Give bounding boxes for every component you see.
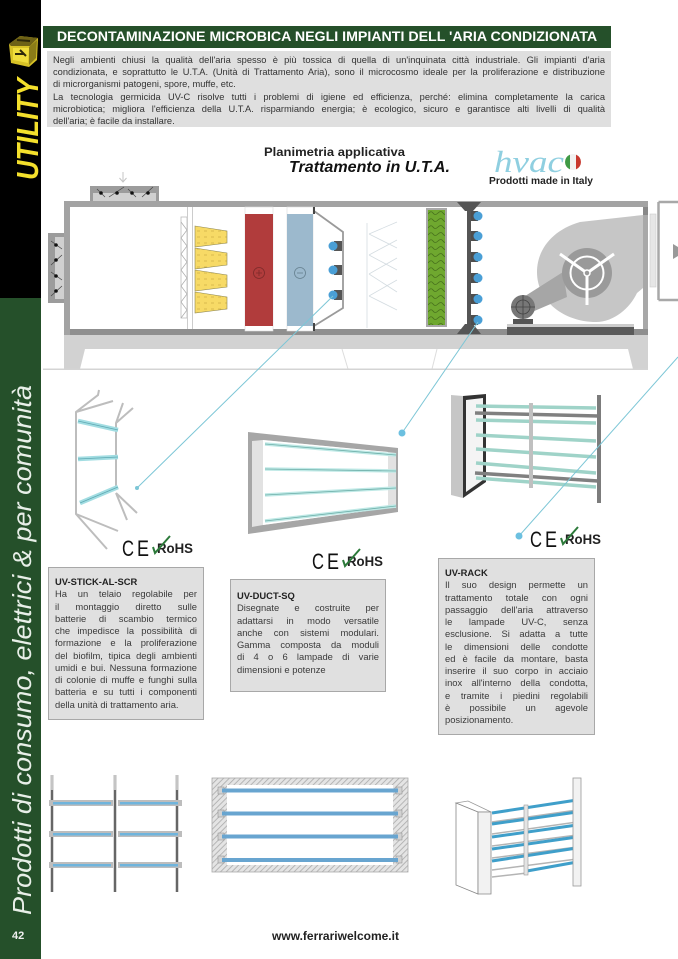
intro text block: di microrganismi patogeni, spore, muffe, etc. [53, 79, 236, 89]
product photo: UV-STICK-AL-SCR [76, 390, 137, 549]
product card: UV-RACK: le lampade UV-C, senza [445, 616, 588, 627]
product card: UV-RACK: trattamento totale con ogni [445, 592, 588, 602]
sidebar: black utility band [0, 0, 45, 298]
product card: UV-DUCT-SQ: dimensioni e potenze [237, 664, 326, 674]
callout: UV-RACK [516, 357, 678, 540]
product card: UV-RACK: passaggio dell'aria attraverso [445, 604, 588, 615]
sidebar: green category band [0, 298, 41, 959]
certification marks: UV-RACK: E [545, 527, 557, 552]
side air intake with dampers [48, 233, 64, 303]
technical drawing: UV-RACK [456, 778, 581, 894]
product card: UV-STICK-AL-SCR: di colonie di muffe e funghi sulla [55, 674, 197, 685]
outlet duct [643, 202, 678, 300]
certification marks: UV-DUCT-SQ [312, 549, 383, 574]
centrifugal fan and motor [507, 215, 643, 335]
intro text block: dell'aria; è facile da installare. [53, 116, 175, 126]
droplet eliminator [367, 222, 397, 328]
callout: UV-DUCT-SQ [398, 322, 478, 436]
icon: yellow utility box [9, 36, 38, 67]
callout: UV-STICK-AL-SCR [135, 296, 333, 490]
UV lamp column with six lamps [457, 202, 482, 334]
product card: UV-DUCT-SQ: adattarsi in modo versatile [237, 614, 379, 626]
product card: UV-STICK-AL-SCR: batterie di scambio termico [55, 613, 197, 624]
intro text block: microbiotica; migliora l'efficienza della U.T.A. risparmiando energia; è ecologico, sicuro e garantisce alti livelli di qualità [53, 104, 605, 114]
footer website: www.ferrariwelcome.it [272, 929, 399, 943]
product card: UV-RACK: posizionamento. [445, 714, 513, 725]
diagram heading: Planimetria applicativa [264, 145, 405, 159]
callout lines to the product photos [135, 296, 678, 540]
product card: UV-STICK-AL-SCR [48, 567, 204, 720]
product card: UV-STICK-AL-SCR: UV-STICK-AL-SCR [55, 576, 137, 587]
intro text block: Negli ambienti chiusi la qualità dell'aria spesso è più tossica di quella di un'inquinata città industriale. Gli impianti d'aria [53, 55, 605, 65]
product card: UV-DUCT-SQ: di 4 o 6 lampade di varie [237, 651, 379, 662]
product card: UV-STICK-AL-SCR: del biofilm, tipica degli ambienti [55, 650, 197, 660]
heating coil [245, 207, 273, 331]
section title [43, 26, 611, 48]
product card: UV-RACK: Il suo design permette un [445, 579, 588, 590]
technical drawing: UV-STICK-AL-SCR [49, 775, 182, 892]
certification marks: UV-DUCT-SQ: RoHS [347, 553, 383, 569]
product card: UV-RACK: UV-RACK [445, 567, 488, 578]
cooling coil [287, 207, 313, 331]
air handling unit diagram [43, 172, 678, 370]
product card: UV-RACK: inserire il suo corpo in acciaio [445, 665, 588, 676]
product card: UV-RACK [438, 558, 595, 735]
product card: UV-DUCT-SQ: anche con sistemi modulari. [237, 627, 379, 638]
product card: UV-STICK-AL-SCR: Ha un telaio regolabile per [55, 588, 197, 599]
product card: UV-STICK-AL-SCR: umidi e bui. Nessuna formazione [55, 662, 197, 673]
product card: UV-RACK: è possibile un agevole [445, 702, 588, 713]
casing and base [43, 201, 648, 370]
certification marks: UV-RACK [530, 527, 601, 552]
certification marks: UV-STICK-AL-SCR [122, 536, 193, 561]
product card: UV-RACK: le dimensioni delle condotte [445, 640, 588, 652]
intro text block: La tecnologia germicida UV-C risolve tutti i problemi di igiene ed efficienza, perché: elimina completamente la carica [53, 92, 605, 102]
product photo: UV-RACK [451, 394, 601, 503]
section title: DECONTAMINAZIONE MICROBICA NEGLI IMPIANTI DELL 'ARIA CONDIZIONATA [57, 29, 597, 45]
certification marks: UV-RACK: C [530, 527, 542, 552]
UV lamp hood with three lamps [313, 207, 343, 331]
certification marks: UV-RACK: RoHS [565, 531, 601, 547]
hvac logo [489, 144, 593, 187]
product card: UV-RACK: esclusione. Si adatta a tutte [445, 628, 588, 639]
product card: UV-DUCT-SQ [230, 579, 386, 692]
certification marks: UV-STICK-AL-SCR: E [137, 536, 149, 561]
top air intake with dampers [90, 172, 159, 201]
product card: UV-STICK-AL-SCR: il montaggio diretto sulle [55, 600, 197, 612]
product card: UV-RACK: ed è facile da montare, basta [445, 653, 588, 664]
product card: UV-STICK-AL-SCR: formazione e la proliferazione [55, 637, 197, 648]
product card: UV-STICK-AL-SCR: batteria e su tutti i componenti [55, 686, 197, 697]
intro text block [47, 51, 611, 127]
product card: UV-DUCT-SQ: Gamma composta da moduli [237, 639, 379, 650]
certification marks: UV-STICK-AL-SCR: C [122, 536, 134, 561]
product card: UV-RACK: inox all'interno della condotta, [445, 677, 588, 688]
certification marks: UV-STICK-AL-SCR: RoHS [157, 540, 193, 556]
page number: 42 [12, 930, 24, 942]
sidebar word: UTILITY: UTILITY [10, 75, 45, 180]
certification marks: UV-DUCT-SQ: E [327, 549, 339, 574]
product card: UV-STICK-AL-SCR: della unità di trattamento aria. [55, 698, 179, 710]
product card: UV-DUCT-SQ: Disegnate e costruite per [237, 602, 379, 613]
pre-filter [181, 207, 192, 329]
product card: UV-STICK-AL-SCR: che impedisce la possibilità di [55, 625, 197, 636]
certification marks: UV-DUCT-SQ: C [312, 549, 324, 574]
technical drawing: UV-DUCT-SQ [212, 778, 408, 872]
sidebar category text: Prodotti di consumo, elettrici & per comunità [7, 385, 37, 915]
diagram heading [264, 145, 450, 176]
green filter [426, 208, 447, 327]
diagram heading: Trattamento in U.T.A. [289, 159, 450, 176]
hvac logo: hvac [494, 144, 564, 179]
product card: UV-DUCT-SQ: UV-DUCT-SQ [237, 590, 295, 601]
yellow bag filters [195, 226, 227, 313]
product photo: UV-DUCT-SQ [248, 432, 398, 534]
intro text block: condizionata, e soprattutto le U.T.A. (Unità di Trattamento Aria), sono il microcosmo ideale per la proliferazione e distribuzione [53, 67, 605, 77]
product card: UV-RACK: e tramite i piedini regolabili [445, 690, 588, 700]
hvac logo: Prodotti made in Italy [489, 175, 593, 187]
